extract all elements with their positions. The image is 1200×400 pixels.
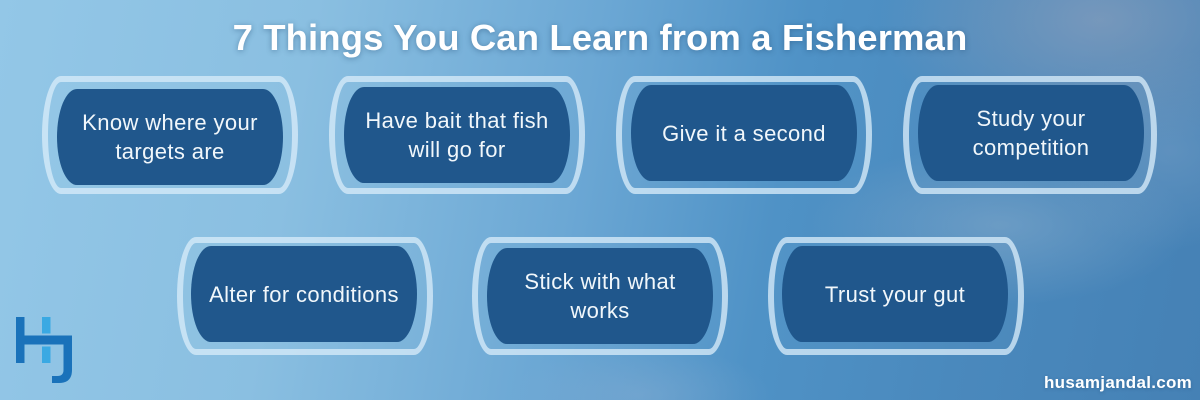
card 1: Know where your targets are: Know where your targets are: [82, 110, 258, 164]
card 7: Trust your gut: [782, 246, 1008, 342]
card 2: Have bait that fish will go for: Have bait that fish will go for: [365, 108, 549, 162]
website credit: husamjandal.com: [1044, 373, 1192, 392]
logo: HJ monogram: [16, 317, 72, 383]
card 3: Give it a second: Give it a second: [662, 120, 826, 146]
card outline 3: [616, 76, 872, 194]
card 4: Study your competition: [918, 85, 1144, 181]
card 5: Alter for conditions: [191, 246, 417, 342]
card 1: Know where your targets are: [57, 89, 283, 185]
card outline 5: [177, 237, 433, 355]
card outline 1: [42, 76, 298, 194]
card outline 6: [472, 237, 728, 355]
card 6: Stick with what works: [487, 248, 713, 344]
card outline 7: [768, 237, 1024, 355]
title: 7 Things You Can Learn from a Fisherman: [233, 17, 967, 58]
card 6: Stick with what works: Stick with what works: [524, 269, 676, 323]
card 2: Have bait that fish will go for: [344, 87, 570, 183]
card 7: Trust your gut: Trust your gut: [825, 282, 965, 306]
card 4: Study your competition: Study your: [977, 106, 1085, 131]
card 3: Give it a second: [631, 85, 857, 181]
card 4: Study your competition: competition: [973, 135, 1089, 160]
card outline 2: [329, 76, 585, 194]
card 5: Alter for conditions: Alter for conditions: [209, 282, 399, 306]
card outline 4: [903, 76, 1157, 194]
